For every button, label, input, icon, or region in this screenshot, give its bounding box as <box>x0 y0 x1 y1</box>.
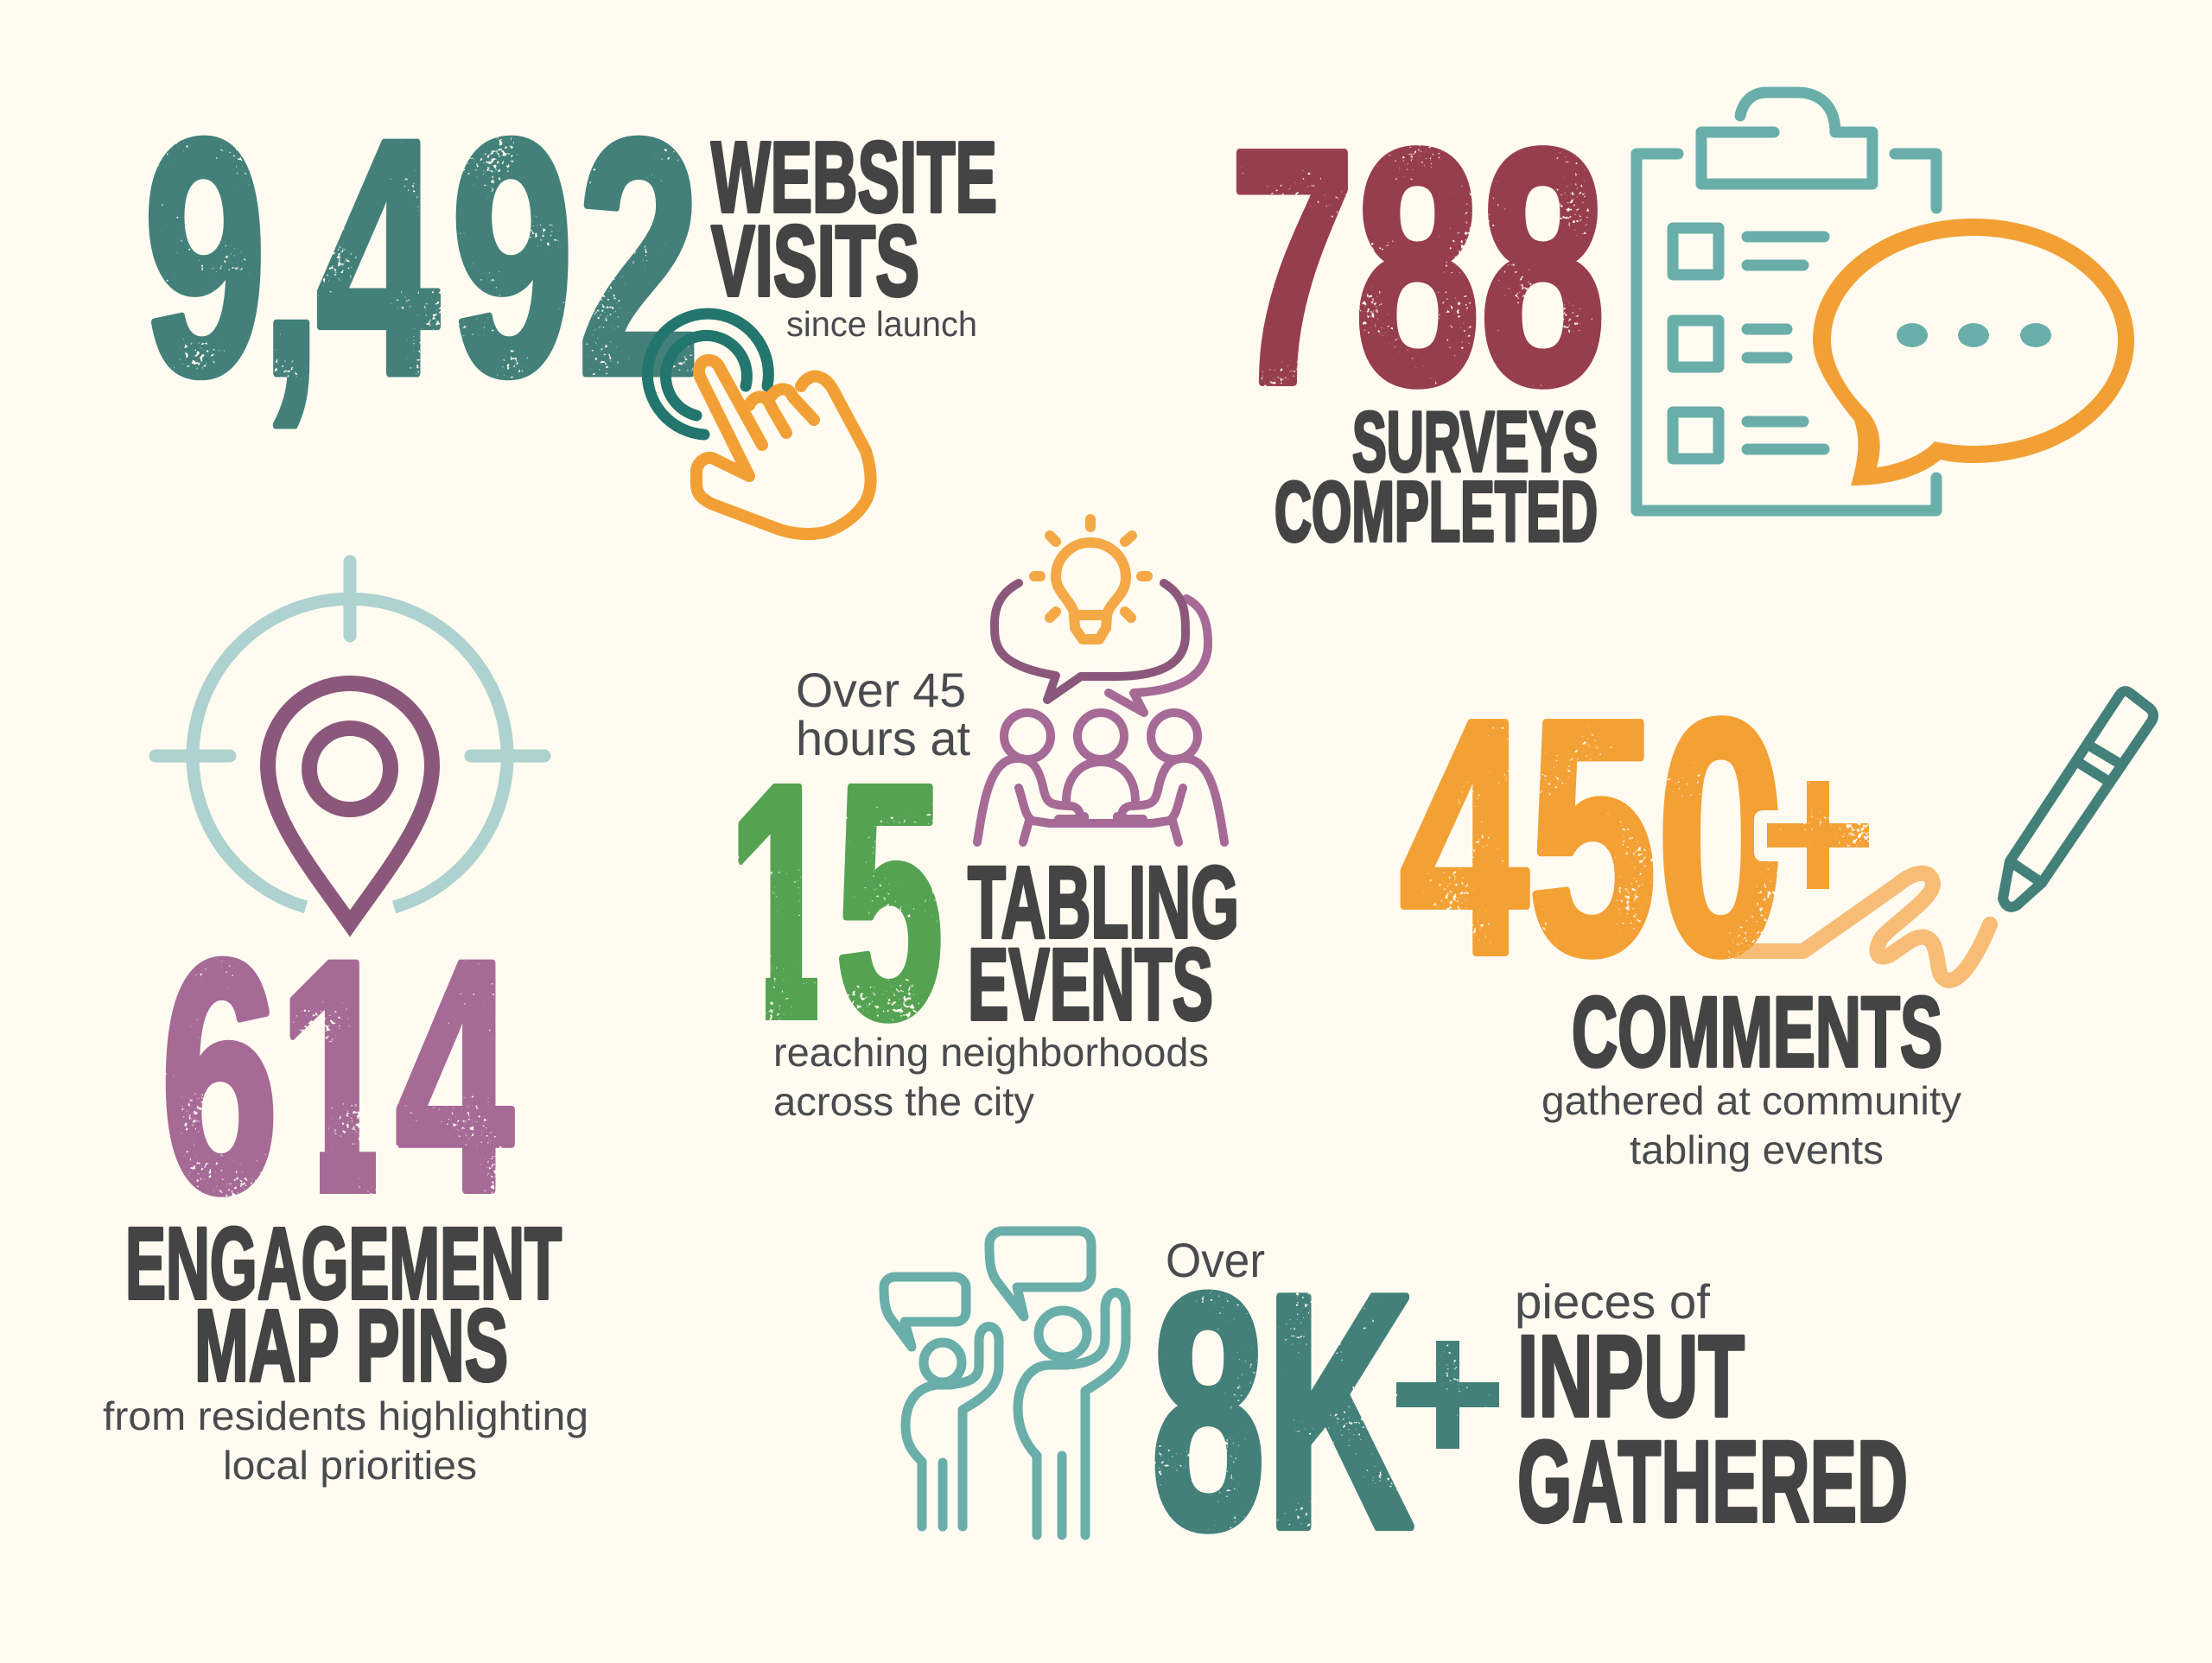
text: over 45 hours at: Over 45 <box>796 663 966 717</box>
stat: input gathered <box>884 1225 1908 1597</box>
number: 15: 15 <box>728 716 944 1087</box>
icon: clipboard <box>1637 92 1936 511</box>
text: gathered at community: gathered at community <box>1541 1078 1961 1123</box>
icon: speech bubbles <box>995 583 1208 713</box>
number: 614: 614 <box>161 892 515 1260</box>
label: surveys completed <box>1274 394 1598 559</box>
stat: engagement map pins <box>103 562 588 1488</box>
label: surveys completed: SURVEYS <box>1352 394 1598 489</box>
label: comments: COMMENTS <box>1572 977 1942 1088</box>
label: engagement map pins <box>125 1207 562 1403</box>
stat: surveys completed <box>1230 80 2134 559</box>
number: 450 plus: 450 <box>1400 651 1785 1023</box>
number: 788: 788 <box>1230 80 1605 453</box>
icon: target and map pin <box>156 562 544 924</box>
icon: speech bubble <box>1813 219 2134 486</box>
text: gathered at community <box>1541 1078 1961 1172</box>
text: from residents: local priorities <box>223 1443 477 1488</box>
text: reaching neighborhoods: across the city <box>773 1079 1034 1124</box>
icon: pen <box>2003 691 2153 907</box>
icon: light bulb <box>1034 519 1147 639</box>
text: over: Over <box>1166 1233 1265 1287</box>
label: tabling events <box>968 846 1239 1042</box>
text: over 45 hours at <box>796 663 970 765</box>
label: tabling events: TABLING <box>968 846 1239 960</box>
icon: clicking hand <box>647 314 871 534</box>
text: gathered at community: tabling events <box>1630 1127 1884 1172</box>
label: surveys completed: COMPLETED <box>1274 464 1598 559</box>
text: pieces of: pieces of <box>1515 1274 1710 1329</box>
stat: website visits <box>143 69 997 534</box>
label: input gathered: INPUT <box>1517 1312 1745 1441</box>
stat: comments <box>1400 651 2153 1172</box>
label: input gathered <box>1517 1312 1908 1546</box>
number: 614 <box>161 892 515 1260</box>
icon: signature squiggle <box>1737 873 1990 981</box>
label: input gathered: GATHERED <box>1517 1418 1908 1546</box>
icon: people at table <box>977 713 1224 842</box>
text: reaching neighborhoods: reaching neighborhoods <box>773 1030 1209 1075</box>
text: since launch: since launch <box>786 304 977 344</box>
label: engagement map pins: MAP PINS <box>194 1289 508 1403</box>
icon: people with speech bubbles <box>884 1231 1126 1535</box>
number: 9,492: 9,492 <box>143 69 701 445</box>
text: reaching neighborhoods <box>773 1030 1209 1124</box>
text: from residents: from residents highlighting <box>103 1393 588 1438</box>
text: from residents <box>103 1393 588 1488</box>
text: over 45 hours at: hours at <box>796 711 970 765</box>
label: engagement map pins: ENGAGEMENT <box>125 1207 562 1321</box>
number: 8K plus: 8K <box>1151 1225 1414 1597</box>
label: website visits: VISITS <box>711 205 919 317</box>
label: tabling events: EVENTS <box>968 928 1213 1042</box>
label: website visits <box>711 121 997 317</box>
stat: tabling events <box>728 519 1239 1124</box>
label: website visits: WEBSITE <box>711 121 997 233</box>
number: 15 <box>728 716 944 1087</box>
